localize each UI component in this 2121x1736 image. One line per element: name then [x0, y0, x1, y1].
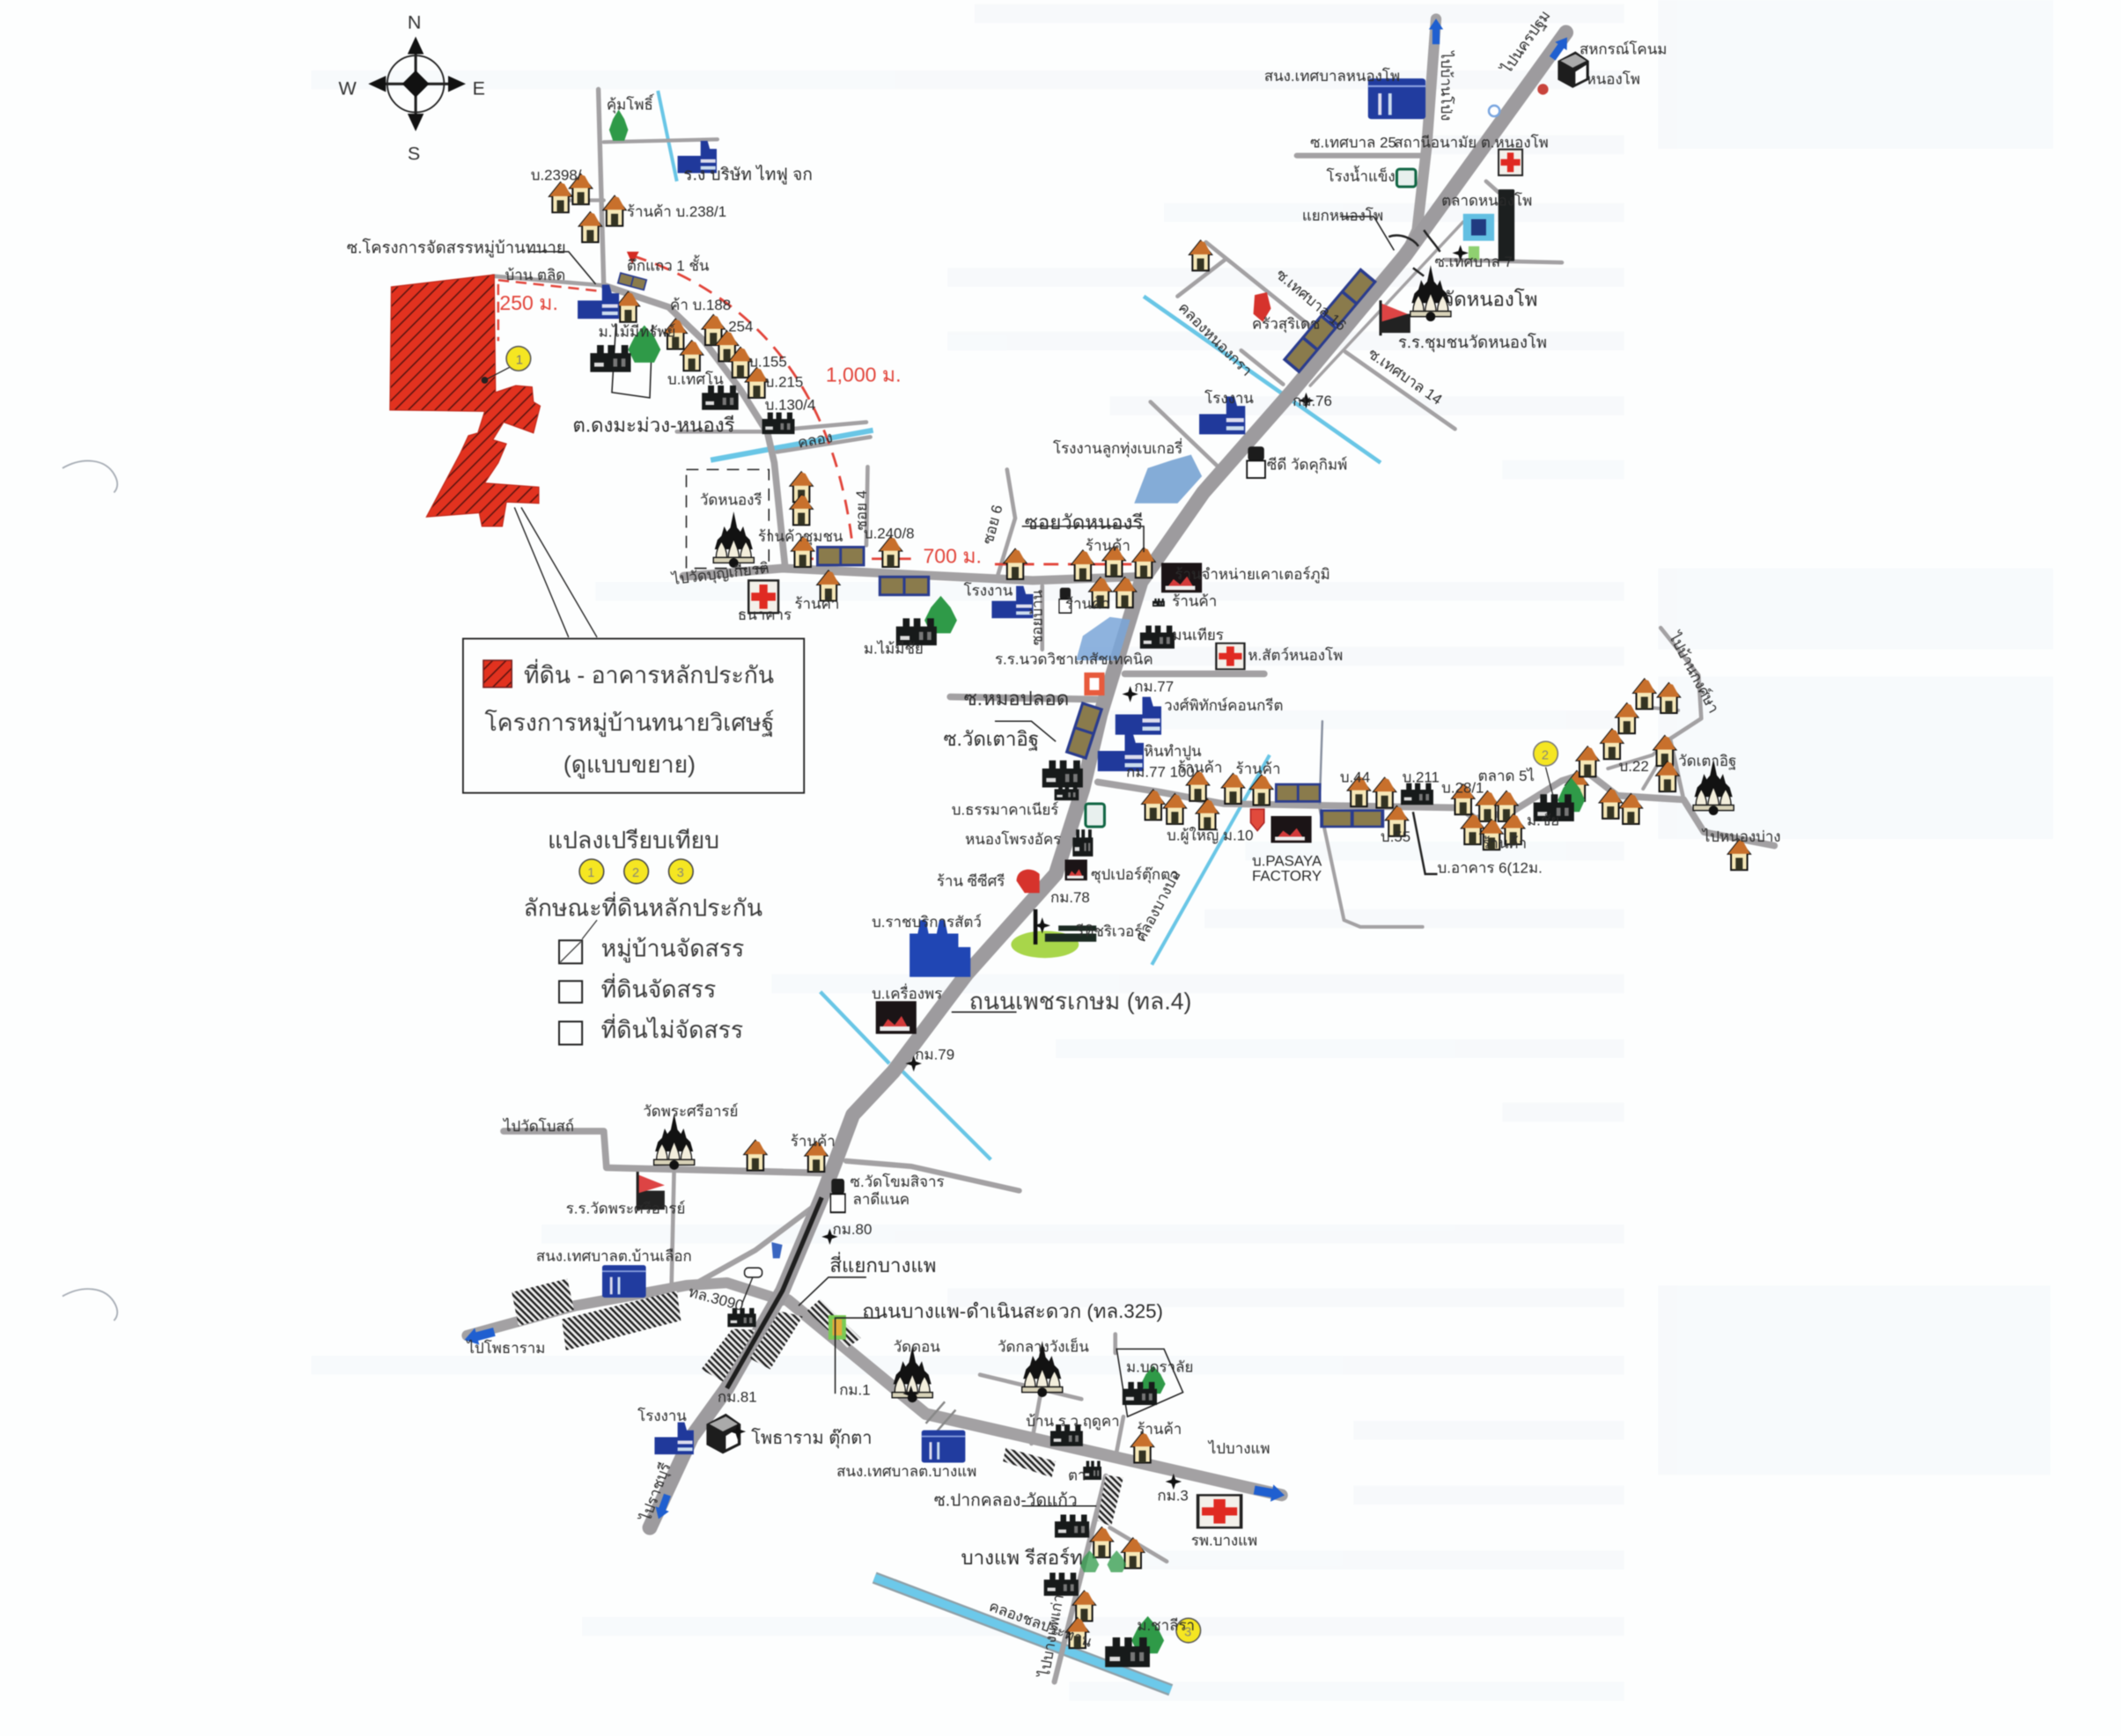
labels: central corridor: มนเทียร: [1172, 627, 1224, 644]
distance: 250 m: [498, 280, 599, 341]
labels: northeast: ร.ร.ชุมชนวัดหนองโพ: [1398, 333, 1547, 353]
legend: collateral land type: ลักษณะที่ดินหลักประกัน: [524, 892, 762, 922]
labels: central corridor: ซ.วัดเตาอิฐ: [944, 728, 1039, 751]
labels: northeast: โรงงาน: [1204, 389, 1254, 407]
labels: central corridor: ซอย 6: [979, 503, 1006, 546]
labels: southwest and south: ไปบางแพ: [1207, 1439, 1270, 1457]
labels: northwest: บ.240/8: [864, 526, 915, 542]
labels: northwest: ซอย 4: [853, 490, 870, 531]
labels: central corridor: ซอยบ้าน: [1029, 589, 1046, 645]
labels: southwest and south: สี่แยกบางแพ: [829, 1252, 936, 1276]
legend: comparison plots: 3: [677, 866, 684, 880]
labels: southwest and south: คลองชลประทาน: [987, 1598, 1094, 1651]
labels: central corridor: กม.77 100: [1126, 763, 1195, 780]
labels: southwest and south: ตา: [1068, 1468, 1086, 1484]
labels: central corridor: ซุปเปอร์ตุ๊กตา: [1091, 866, 1179, 884]
labels: southwest and south: บ้าน ร.ว.ฤดูคา: [1026, 1413, 1120, 1431]
labels: northwest: คลอง: [796, 429, 834, 452]
labels: northeast: โรงงานลูกทุ่งเบเกอรี่: [1053, 438, 1182, 458]
labels: central corridor: ร้าน ซีซีศรี: [937, 873, 1005, 890]
labels: northwest: บ.เทศโน: [667, 371, 724, 388]
labels: southwest and south: รพ.บางแพ: [1191, 1532, 1257, 1548]
labels: northeast: ซ.เทศบาล 7: [1434, 254, 1513, 270]
labels: east branch: บ.211: [1403, 769, 1440, 785]
labels: southwest and south: ม.ชาลีรา: [1137, 1617, 1195, 1634]
labels: northwest: .254: [725, 319, 753, 335]
labels: east branch: บ.44: [1340, 769, 1370, 785]
labels: northwest: ม.ไม้มีทรัพย์: [599, 323, 675, 341]
labels: central corridor: หนองโพรงอัคร: [965, 830, 1061, 848]
fenced lots: [612, 325, 1183, 1416]
labels: northwest: [347, 93, 915, 589]
main road: Phetkasem highway: [650, 33, 1566, 1527]
distance ring: 1,000 m: [627, 252, 901, 548]
dashed boundary: Wat Nong Ri: [687, 469, 769, 569]
legend box: collateral land: โครงการหมู่บ้านทนายวิเศษฐ์: [485, 710, 774, 737]
labels: northwest: คุ้มโพธิ์: [607, 93, 655, 114]
labels: east branch: ไปบ้านกงศ์ษา: [1665, 628, 1723, 716]
labels: southwest and south: ร้านค้า: [791, 1133, 836, 1150]
labels: northwest: ร้านค้า บ.238/1: [627, 203, 726, 220]
legend: collateral land type: ที่ดินไม่จัดสรร: [601, 1013, 743, 1043]
labels: central corridor: ร้านจำหน่ายเคาเตอร์ภูมิ: [1175, 566, 1330, 584]
labels: northwest: บ้าน ตลิด: [505, 267, 565, 283]
labels: central corridor: หินทำปูน: [1144, 743, 1202, 761]
labels: southwest and south: [466, 1103, 1270, 1681]
labels: northwest: ค้า บ.188: [670, 297, 731, 313]
labels: northeast: สนง.เทศบาลหนองโพ: [1264, 67, 1400, 85]
hatched buildings: [512, 1278, 1123, 1526]
hole punch mark: upper: [63, 461, 117, 492]
labels: northwest: บ.2398/: [531, 166, 582, 183]
labels: northeast: ซ.เทศบาล 14: [1365, 345, 1445, 408]
labels: northwest: ไปวัดบุญเกียรติ: [669, 559, 770, 589]
marker 3: 3: [1184, 1625, 1191, 1639]
labels: northeast: กม.76: [1292, 393, 1332, 409]
legend: collateral land type: ที่ดินจัดสรร: [601, 973, 716, 1003]
legend box: collateral land: ที่ดิน - อาคารหลักประกัน: [524, 658, 774, 688]
labels: central corridor: ร้านค้า: [1172, 593, 1217, 610]
labels: southwest and south: สนง.เทศบาลต.บ้านเลือก: [536, 1248, 692, 1265]
labels: northwest: ซ.โครงการจัดสรรหมู่บ้านทนาย: [347, 238, 566, 257]
labels: northeast: [1053, 7, 1667, 474]
labels: east branch: บ.55: [1381, 828, 1410, 845]
labels: southwest and south: โรงงาน: [637, 1407, 687, 1424]
legend: collateral land type: [524, 892, 762, 1045]
canals: [658, 91, 1381, 1690]
labels: central corridor: ร้านค้า: [794, 596, 839, 613]
marker 3: [1176, 1618, 1201, 1643]
labels: east branch: ตลาด 5ไ: [1478, 767, 1535, 784]
labels: northeast: ตลาดหนองโพ: [1441, 192, 1532, 210]
labels: southwest and south: โพธาราม ตุ๊กตา: [751, 1428, 872, 1449]
houses: [549, 174, 1750, 1648]
small roadside signs: [742, 84, 1549, 1305]
labels: central corridor: บ.เครื่องพร: [872, 982, 942, 1002]
labels: northwest: ร.ง บริษัท ไทฟู จก: [683, 164, 813, 184]
marker 2: 2: [1542, 748, 1549, 762]
labels: southwest and south: กม.3: [1157, 1488, 1189, 1504]
road direction arrows: [465, 20, 1571, 1519]
labels: central corridor: ร้านค้า: [1236, 761, 1280, 777]
labels: central corridor: ถนนเพชรเกษม (ทล.4): [969, 989, 1191, 1015]
labels: central corridor: ร้านค้า: [1086, 538, 1130, 555]
labels: southwest and south: ร.ร.วัดพระศรีอารย์: [566, 1201, 685, 1217]
labels: northwest: ต.ดงมะม่วง-หนองรี: [572, 414, 735, 436]
labels: central corridor: ร้านค้า: [1177, 760, 1222, 776]
labels: northeast: สหกรณ์โคนม: [1580, 40, 1667, 57]
labels: northwest: วัดหนองรี: [700, 491, 762, 508]
labels: southwest and south: ซ.ปากคลอง-วัดแก้ว: [934, 1492, 1078, 1511]
labels: southwest and south: ซ.วัดโขมสิจาร: [850, 1173, 945, 1190]
labels: central corridor: คลองบางบ่อ: [1132, 867, 1184, 945]
compass rose: E: [473, 78, 485, 99]
labels: east branch: [1252, 628, 1781, 885]
labels: northwest: บ.215: [765, 374, 803, 391]
collateral land parcel: [390, 275, 541, 526]
labels: northeast: ครัวสุริเดช: [1252, 315, 1320, 333]
road kilometre stars: [730, 245, 1469, 1490]
legend: comparison plots: [548, 828, 719, 884]
legend box: collateral land: (ดูแบบขยาย): [563, 752, 696, 779]
blue factories and buildings: [578, 78, 1425, 1463]
labels: southwest and south: วัดดอน: [894, 1338, 940, 1355]
labels: northeast: ซีดี วัดคุกิมพ์: [1267, 456, 1347, 474]
labels: northwest: บ.155: [748, 354, 787, 371]
labels: southwest and south: ไปโพธาราม: [466, 1339, 545, 1357]
labels: northeast: ซ.เทศบาล 25: [1310, 135, 1396, 151]
hospitals: [748, 150, 1522, 1527]
legend: comparison plots: แปลงเปรียบเทียบ: [548, 828, 719, 854]
labels: southwest and south: ไปราชบุรี: [636, 1460, 674, 1526]
black factories: [590, 189, 1574, 1667]
labels: east branch: บ.อาคาร 6(12ม.: [1438, 859, 1543, 876]
labels: central corridor: ร้านค้า: [1065, 596, 1110, 613]
compass rose: [338, 11, 485, 164]
distance: 250 m: 250 ม.: [499, 291, 558, 314]
labels: northeast: วัดหนองโพ: [1443, 288, 1537, 310]
labels: central corridor: กม.77: [1134, 678, 1174, 695]
labels: central corridor: บ.ธรรมาคาเนียร์: [952, 801, 1058, 818]
labels: southwest and south: กม.81: [718, 1388, 757, 1405]
labels: northwest: ร้านค้าชุมชน: [758, 528, 843, 546]
labels: central corridor: รีทิชริเวอร์: [1075, 923, 1142, 940]
labels: southwest and south: สนง.เทศบาลต.บางแพ: [836, 1463, 976, 1480]
school with flag: [637, 300, 1410, 1210]
restaurants and shops: [876, 214, 1494, 1034]
labels: central corridor: ซ.หมอปลอด: [964, 688, 1069, 710]
labels: central corridor: บ.ผู้ใหญ่ ม.10: [1167, 826, 1254, 844]
labels: southwest and south: วัดพระศรีอารย์: [643, 1103, 738, 1120]
labels: southwest and south: ไปวัดโบสถ์: [502, 1117, 574, 1135]
labels: northeast: ซ.เทศบาล 16: [1273, 266, 1350, 334]
labels: central corridor: กม.78: [1050, 889, 1090, 906]
labels: central corridor: วงศ์พิทักษ์คอนกรีต: [1164, 697, 1283, 714]
labels: east branch: ม.ชัย: [1527, 813, 1559, 829]
hole punch mark: lower: [63, 1289, 117, 1320]
marker 1: 1: [516, 353, 523, 367]
marker 2: [1534, 741, 1558, 798]
labels: east branch: ไปหนองบ่าง: [1701, 828, 1781, 845]
labels: southwest and south: ถนนบางแพ-ดำเนินสะดวก (ทล.325): [862, 1300, 1163, 1322]
labels: southwest and south: ทล.3090: [687, 1284, 746, 1314]
black cubes and petrol stations: [706, 51, 1589, 1453]
labels: southwest and south: กม.80: [833, 1221, 872, 1238]
labels: southwest and south: ม.บดราลัย: [1126, 1359, 1193, 1376]
labels: northeast: หนองโพ: [1587, 70, 1640, 87]
labels: southwest and south: ลาดีแนค: [853, 1191, 910, 1208]
bridge marks: [926, 230, 1440, 1431]
labels: east branch: บ.28/1: [1441, 780, 1484, 797]
legend: comparison plots: 1: [587, 866, 594, 880]
labels: northeast: โรงน้ำแข็ง: [1327, 166, 1396, 185]
flyover section: [727, 1197, 821, 1388]
labels: northeast: แยกหนองโพ: [1302, 207, 1383, 224]
labels: central corridor: บ.ราชบริการสัตว์: [872, 914, 982, 931]
leader lines to legend: [514, 507, 597, 637]
labels: northeast: ไปนครปฐม: [1497, 7, 1554, 78]
secondary roads: [468, 19, 1774, 1682]
legend: collateral land type: หมู่บ้านจัดสรร: [601, 936, 744, 963]
labels: central corridor: กม.79: [915, 1046, 954, 1063]
labels: central corridor: โรงงาน: [964, 581, 1013, 599]
labels: central corridor: ม.ไม้มีชัย: [864, 639, 924, 657]
labels: central corridor: [738, 503, 1343, 1063]
labels: northeast: ไปบ้านโป่ง: [1438, 49, 1455, 121]
market blocks: [617, 268, 1384, 828]
compass rose: S: [408, 143, 420, 164]
trees: [609, 109, 1585, 1653]
labels: east branch: บ.PASAYA: [1252, 853, 1322, 870]
resort golf course: [1011, 909, 1096, 958]
labels: southwest and south: บางแพ รีสอร์ท: [961, 1547, 1083, 1569]
labels: northwest: ตึกแถว 1 ชั้น: [627, 254, 710, 274]
legend box: collateral land: [463, 638, 804, 793]
distance ring: 1,000 m: 1,000 ม.: [826, 363, 901, 386]
marker 1: [482, 346, 531, 384]
labels: northeast: สถานีอนามัย ต.หนองโพ: [1394, 134, 1549, 151]
labels: central corridor: ซอยวัดหนองรี: [1025, 511, 1143, 533]
labels: southwest and south: ร้านค้า: [1137, 1421, 1182, 1438]
labels: northwest: บ.130/4: [765, 397, 815, 414]
labels: east branch: FACTORY: [1252, 868, 1322, 885]
labels: east branch: ร้านค้า: [1482, 835, 1527, 852]
labels: central corridor: ธนาคาร: [738, 607, 792, 623]
labels: central corridor: ห.สัตว์หนองโพ: [1248, 646, 1343, 664]
distance: 700 m: [799, 544, 1151, 567]
distance: 700 m: 700 ม.: [923, 544, 982, 567]
labels: northeast: คลองหนองกรา: [1175, 299, 1256, 379]
7-eleven logo: [829, 1315, 846, 1340]
labels: southwest and south: ไปบางแพเก่า: [1035, 1593, 1067, 1681]
labels: southwest and south: กม.1: [839, 1382, 871, 1399]
callout arrows and underlines: [528, 217, 1438, 1506]
temples: [654, 265, 1734, 1402]
labels: east branch: วัดเตาอิฐ: [1678, 753, 1736, 770]
legend: comparison plots: 2: [632, 866, 639, 880]
labels: central corridor: ร.ร.นวดวิชาเภสัชเทคนิค: [995, 651, 1153, 668]
compass rose: N: [408, 11, 421, 33]
compass rose: W: [338, 78, 357, 99]
labels: southwest and south: วัดกลางวังเย็น: [998, 1337, 1089, 1355]
labels: east branch: บ.22: [1619, 758, 1649, 775]
